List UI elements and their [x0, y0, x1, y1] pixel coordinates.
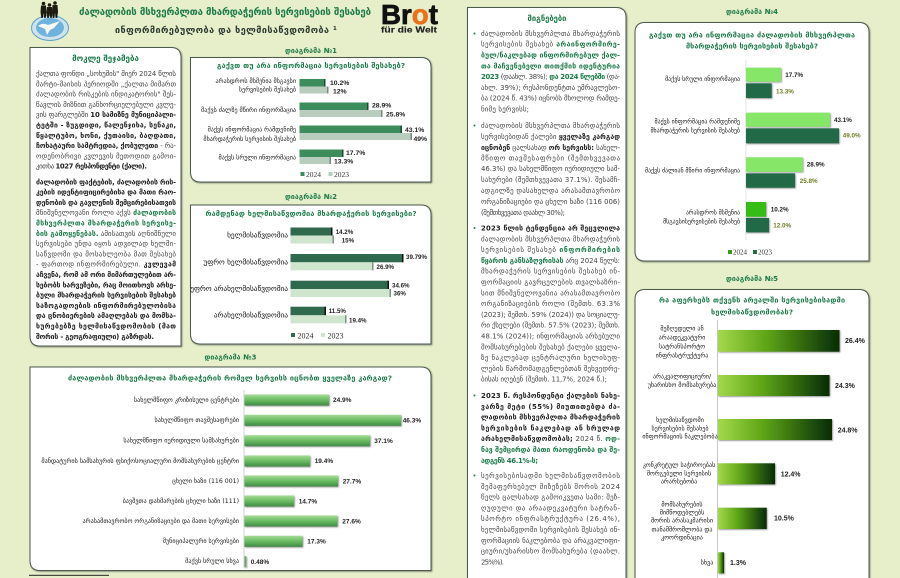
- values: 25.8%: [800, 178, 818, 185]
- finding 1: ახლ. 39%); რესპონდენტთა უმრავლესო-: [481, 83, 620, 92]
- category labels: მხარდაჭერის სერვისის შესახებ: [650, 128, 740, 134]
- question: [649, 30, 855, 50]
- question: რა აფერხებს თქვენს არეალში სერვისებისადმი: [659, 296, 845, 304]
- finding 3: სით მნიშვნელოვანია არასამთავრობო: [481, 288, 621, 297]
- category labels: [201, 78, 296, 162]
- category labels: სატრანსპორტო: [659, 344, 705, 350]
- finding 5: ციური/უხარისხო მომსახურება (დაახლ.: [481, 547, 620, 556]
- category labels: [190, 230, 288, 320]
- values: [771, 72, 861, 230]
- summary text: paragraph one: წავლის მიზნით განხორციელებული კვლე-: [36, 100, 176, 109]
- finding 3: 2023 წლის ტენდენცია არ შეცვლილა: [481, 224, 620, 232]
- summary text: paragraph two: სებობს ხარვეზები, რაც მოითხოვს არსე-: [36, 281, 176, 289]
- finding 3: [474, 224, 621, 384]
- subtitle: ინფორმირებულობა და ხელმისაწვდომობა ¹: [115, 25, 337, 36]
- finding 4: ნავ შემცირდა მათი რაოდენობა და შე-: [481, 446, 620, 454]
- category labels: მუნიციპალური სერვისები: [163, 536, 239, 545]
- values: [329, 229, 427, 324]
- finding 5: წელს ცალსახად გამოიკვეთა სამი: შეზ-: [481, 494, 620, 502]
- values: 49.0%: [843, 132, 861, 140]
- diagram 3 label: დიაგრამა №3: [204, 354, 257, 362]
- values: 46.3%: [403, 418, 421, 424]
- summary text: paragraph two: შორის - გეოგრაფიული) გაზრდას.: [36, 333, 154, 341]
- category labels: კოორდინაცია: [661, 535, 703, 542]
- values: 19.4%: [349, 318, 367, 324]
- finding 2: სერვისებიდან ქალები ყველაზე კარგად: [481, 132, 620, 141]
- finding 1: ძალადობის მსხვერპლთა მხარდაჭერის: [481, 29, 620, 38]
- question: გაქვთ თუ არა ინფორმაცია სერვისების შესახებ?: [217, 61, 405, 70]
- values: 37.1%: [374, 438, 393, 445]
- summary text: paragraph one: ჩოხატაური სამტრედია, ქობულეთი - რა-: [36, 141, 176, 150]
- panel: diagram 1: [190, 58, 431, 182]
- finding 2: იცნობენ ცალსახად ორ სერვისს: სახელ-: [481, 144, 620, 152]
- values: 12.0%: [773, 222, 792, 230]
- category labels: ინფრასტრუქტურა: [656, 352, 708, 360]
- values: 17.7%: [785, 72, 804, 79]
- legend: 2023: [758, 248, 772, 256]
- title: ძალადობის მსხვერპლთა მხარდაჭერის სერვისების შესახებ: [79, 7, 371, 18]
- category labels: [41, 395, 239, 565]
- category labels: მაქვს ძალზე მწირი ინფორმაცია: [201, 107, 296, 114]
- finding 2: სახურები (შემთხვევათა 37.1%). შესამჩ-: [481, 175, 620, 184]
- summary text: paragraph two: კების იდენტიფიცირებისა და მათი რაო-: [36, 189, 176, 197]
- summary text: paragraph two: სერვისები უნდა იყოს ადვილად ხელმი-: [36, 239, 176, 248]
- category labels: არაადეკვატური: [659, 334, 705, 342]
- finding 4: [474, 392, 620, 465]
- finding 5: [474, 471, 620, 566]
- finding 5: სპორტო ინფრასტრუქტურა (26.4%),: [481, 514, 620, 523]
- values: 13.3%: [334, 158, 353, 166]
- category labels: სერვისების შესახებ: [651, 425, 709, 432]
- category labels: არასდროს მსმენია მსგავსი: [216, 78, 296, 85]
- category labels: უფრო არახელმისაწვდომია: [190, 284, 288, 293]
- finding 4: ადგენს 46.1%-ს;: [481, 457, 538, 465]
- values: 27.6%: [342, 518, 361, 526]
- legend: [291, 332, 344, 340]
- values: 15%: [342, 238, 355, 244]
- finding 5: შემაფერხებელ მიზეზებს შორის 2024: [481, 482, 620, 491]
- values: 24.8%: [838, 428, 858, 434]
- summary text: paragraph two: მსხვერპლთა მხარდაჭერის სერვისე-: [36, 220, 176, 228]
- category labels: უხარისხო მომსახურება: [648, 382, 716, 389]
- category labels: შორის არასაკმარისი: [651, 518, 713, 525]
- summary text: paragraph two: აჩვენა, რომ ამ ორი მიმართულებით არ-: [36, 271, 176, 279]
- summary text: paragraph one: [36, 69, 176, 171]
- category labels: არახელმისაწვდომია: [214, 310, 288, 320]
- category labels: მხარდაჭერის სერვისის შესახებ: [203, 136, 296, 143]
- category labels: მაქვს ინფორმაცია რამდენიმე: [655, 118, 740, 126]
- finding 3: ძალადობის მსხვერპლთა მხარდაჭერის: [481, 234, 620, 243]
- finding 2: (შემთხვევათა დაახლ 30%);: [481, 209, 565, 217]
- values: 13.3%: [776, 88, 794, 96]
- values: 26.9%: [376, 264, 395, 271]
- summary text: paragraph one: ქალთა ფონდი „სოხუმის" მიერ 2024 წლის: [36, 69, 176, 78]
- summary text: paragraph two: ბის გამოყენებას. ამისათვის აღნიშნული: [36, 230, 176, 238]
- finding 1: [474, 29, 620, 114]
- values: 17.3%: [307, 538, 326, 546]
- category labels: მორგებული სერვისის: [647, 470, 711, 477]
- values: 10.5%: [774, 516, 795, 522]
- finding 4: სერვისების ნაკლებად ან სრულად: [481, 424, 620, 432]
- summary text: paragraph two: ბული მხარდაჭერის სერვისების შესახებ: [36, 292, 176, 300]
- category labels: ხელმისაწვდომია: [227, 230, 288, 240]
- question: მხარდაჭერის სერვისების შესახებ?: [686, 42, 818, 50]
- summary text: paragraph one: ძალადობის რისკების ინდიკატორის" შეს-: [36, 90, 176, 99]
- panel: diagram 4: [635, 22, 869, 261]
- finding 3: ორგანიზაციების როლი (შემთხ. 63.3%: [481, 299, 620, 308]
- summary text: paragraph two: - ფართოდ ინფორმირებული. კვლევამ: [36, 260, 176, 269]
- category labels: მაქვს სრული ინფორმაცია: [219, 154, 296, 162]
- category labels: ცხელი ხაზი (116 001): [172, 477, 239, 485]
- panel: diagram 2: [190, 205, 431, 344]
- values: 14.2%: [336, 229, 354, 236]
- finding 3: ბისას იღებენ (შემთხ. 11,7%, 2024 წ.);: [481, 376, 607, 384]
- summary text: paragraph one: მარტი-მაისის პერიოდში „ქალთა მიმართ: [36, 79, 176, 88]
- finding 1: 2023 (დაახლ. 38%); და 2024 წლებში (და-: [481, 73, 620, 81]
- legend: 2024: [298, 332, 314, 340]
- values: 19.4%: [315, 458, 333, 465]
- legend: 2023: [328, 332, 344, 340]
- values: 14.7%: [299, 498, 317, 506]
- finding 1: ბულ/ნაკლებად ინფორმირებულ ქალ-: [481, 52, 620, 60]
- category labels: სხვა: [701, 560, 713, 567]
- category labels: [642, 325, 718, 567]
- panel: findings: [468, 8, 626, 578]
- finding 5: ფორმაციის ნაკლებობა და არაკვალიფი-: [481, 536, 620, 545]
- panel: diagram 3: [30, 367, 431, 570]
- finding 2: 46.3%) და სახელმწიფო იურიდიული სამ-: [481, 164, 620, 173]
- finding 2: [474, 121, 621, 217]
- finding 2: ძალადობის მსხვერპლთა მხარდაჭერის: [481, 121, 620, 130]
- summary text: paragraph one: ოდენობრივი კვლევის მეთოდით გამოი-: [36, 151, 176, 160]
- category labels: სახელმწიფო კრიზისული ცენტრები: [134, 395, 239, 404]
- axis: [244, 390, 245, 568]
- logo: women's fund emblem: [32, 1, 68, 40]
- finding 3: 48.1% (2024)); ინფორმაციას არსებული: [481, 332, 620, 340]
- category labels: სახელმწიფო იურიდიული სამსახურები: [123, 436, 239, 444]
- values: 17.7%: [346, 150, 365, 157]
- values: [251, 397, 421, 566]
- values: 36%: [394, 290, 406, 298]
- summary text: paragraph one: კითხა 1027 რესპონდენტი (ქალი).: [36, 163, 147, 171]
- values: 11.5%: [329, 308, 346, 315]
- values: 39.79%: [406, 254, 427, 261]
- values: 24.3%: [835, 383, 856, 390]
- category labels: არარსებობა: [661, 479, 697, 486]
- footnote rule: [29, 575, 109, 576]
- category labels: [645, 76, 740, 226]
- bars: [244, 394, 401, 567]
- finding 4: ლადობის მსხვერპლთა მხარდაჭერის: [481, 414, 620, 422]
- category labels: მაქვს ინფორმაცია რამდენიმე: [208, 126, 296, 134]
- summary text: paragraph two: ხურებებზე ხელმისაწვდომობის (მათ: [36, 322, 176, 330]
- question: ძალადობის მსხვერპლთა მხარდაჭერის რომელ სერვისს იცნობთ ყველაზე კარგად?: [68, 374, 392, 382]
- category labels: სერვისების შესახებ: [239, 86, 296, 94]
- legend: [728, 248, 772, 256]
- category labels: ინფორმაციის ნაკლებობა: [642, 434, 718, 441]
- values: 27.7%: [343, 478, 361, 486]
- values: 10.2%: [330, 80, 349, 87]
- category labels: არაკვალიფიციური/: [653, 374, 712, 380]
- question: [659, 296, 845, 316]
- finding 2: ადგილზე დასახელდა არასამთავრობო: [481, 186, 621, 195]
- finding 2: მწიფო თავშესაფრები (შემთხვევათა: [481, 154, 620, 162]
- values: 12.4%: [781, 472, 801, 478]
- legend: 2024: [306, 170, 321, 179]
- finding 3: მხარდაჭერის სერვისების შესახებ ინ-: [481, 267, 620, 276]
- values: 26.4%: [845, 338, 866, 345]
- bars: [718, 330, 840, 573]
- category labels: სახელმწიფო თავშესაფრები: [155, 415, 239, 424]
- category labels: მსგავსისერვისების შესახებ: [663, 218, 740, 226]
- finding 1: თა მაჩვენებელი თითქმის იდენტურია: [481, 62, 620, 70]
- category labels: მაქვს ძალიან მწირი ინფორმაცია: [645, 168, 740, 174]
- values: [730, 338, 866, 567]
- bars: [290, 228, 404, 323]
- question: გაქვთ თუ არა ინფორმაცია ძალადობის მსხვერპლთა: [649, 30, 855, 40]
- finding 1: ბა (2024 წ. 43%) იცნობს მხოლოდ რამდე-: [481, 94, 620, 103]
- values: 25.8%: [386, 112, 405, 118]
- finding 3: რი ქსელები (შემთხ. 57.5% (2023); შემთხ.: [481, 321, 620, 330]
- finding 3: ფორმაციის გავრცელების თვალსაზრი-: [481, 278, 620, 286]
- values: 28.9%: [372, 102, 391, 110]
- category labels: არასამთავრობო ორგანიზაციები და მათი სერვისები: [83, 516, 239, 525]
- category labels: ხელმისაწვდომი: [656, 417, 704, 424]
- finding 1: ნიმე სერვისს;: [481, 104, 529, 114]
- summary text: paragraph two: საწვდომი და მოსახლეობა მათ შესახებ: [36, 250, 176, 258]
- category labels: ბავშვთა დახმარების ცხელი ხაზი (111): [123, 496, 239, 505]
- finding 1: სერვისების შესახებ არაინფორმირე-: [481, 40, 620, 49]
- values: [330, 80, 427, 166]
- finding 3: სერვისების შესახებ ინფორმირების: [481, 245, 620, 254]
- legend: 2023: [334, 170, 349, 179]
- summary text: paragraph two: ძალადობის ფაქტების, ძალადობის რის-: [36, 178, 176, 186]
- summary text: paragraph two: დენობის და გავლენის შემცირებისათვის: [36, 199, 176, 207]
- category labels: მომსახურების: [661, 501, 703, 508]
- finding 5: 25%%).: [481, 558, 504, 566]
- values: 10.2%: [771, 206, 789, 214]
- legend: [300, 170, 349, 179]
- legend: 2024: [733, 248, 748, 256]
- finding 4: 2023 წ. რესპონდენტი ქალების ნახე-: [481, 392, 620, 400]
- bars: [746, 68, 839, 232]
- values: 0.48%: [251, 559, 269, 566]
- category labels: მანდატურის სამსახურის ფსიქოსოციალური მომსახურების ცენტრი: [41, 456, 239, 465]
- values: 1.3%: [730, 560, 747, 567]
- summary text: paragraph two: და ცნობიერების ამაღლებას და მომსა-: [36, 312, 176, 320]
- values: 49%: [414, 136, 427, 143]
- category labels: არასდროს მსმენია: [686, 210, 740, 216]
- finding 3: ზე ნაკლებად ცენტრალური ხელისუფ-: [481, 353, 620, 362]
- axis: [717, 320, 718, 578]
- finding 5: ღუდული და არაადეკვატური სატრან-: [481, 503, 620, 512]
- summary text: paragraph two: [36, 178, 176, 341]
- category labels: მაქვს სრული სხვა: [185, 556, 239, 565]
- category labels: უფრო ხელმისაწვდომია: [203, 258, 288, 266]
- finding 3: ლების წარმომადგენლებთან შეხვედრე-: [481, 364, 620, 373]
- category labels: თანამშრომლობა და: [652, 526, 712, 533]
- finding 2: ორგანიზაციები და ცხელი ხაზი (116 006): [481, 197, 620, 206]
- finding 3: წყაროს განსაზღვრისას არც 2024 წელს:: [481, 256, 620, 265]
- summary text: paragraph two: საზოგადოების ინფორმირებულობისა: [36, 302, 176, 310]
- axis: [744, 60, 747, 240]
- summary heading: მოკლე შეჯამება: [72, 54, 139, 63]
- diagram 2 label: დიაგრამა №2: [285, 193, 337, 201]
- finding 4: ვარზე მეტი (55%) მიუთითებდა ძა-: [481, 403, 620, 411]
- values: 24.9%: [333, 397, 352, 404]
- values: 28.9%: [807, 162, 825, 168]
- diagram 5 label: დიაგრამა №5: [726, 275, 778, 283]
- finding 5: სერვისებისადმი ხელმისაწვდომობის: [481, 471, 620, 480]
- panel: summary: [30, 48, 181, 346]
- category labels: შეზღუდული ან: [660, 325, 704, 332]
- category labels: მაქვს სრული ინფორმაცია: [665, 76, 740, 83]
- category labels: კონკრეტულ საჭიროებას: [643, 462, 715, 469]
- summary text: paragraph two: მნიშვნელოვანი როლი აქვს ძალადობის: [36, 208, 176, 217]
- summary text: paragraph one: ტეტში - ზუგდიდი, წალენჯიხა, სენაკი,: [36, 122, 176, 130]
- values: 43.1%: [834, 117, 852, 124]
- finding 5: ხელმისაწვდომი სერვისების შესახებ ინ-: [481, 525, 620, 534]
- values: 34.6%: [392, 282, 410, 290]
- question: ხელმისაწვდომობას?: [711, 308, 793, 316]
- diagram 4 label: დიაგრამა №4: [726, 8, 778, 16]
- category labels: მიმწოდებლებს: [660, 509, 704, 516]
- summary text: paragraph one: წყალტუბო, ხონი, ქუთაისი, ბაღდათი,: [36, 132, 176, 140]
- finding 3: მომსახურებების შესახებ ქალები ყველა-: [481, 342, 620, 351]
- finding 3: (2023); შემთხ. 59% (2024)) და სოციალუ-: [481, 311, 620, 319]
- values: 12%: [333, 88, 347, 96]
- bars: [300, 79, 412, 164]
- panel: diagram 5: [635, 290, 869, 578]
- diagram 1 label: დიაგრამა №1: [285, 47, 337, 55]
- values: 43.1%: [405, 127, 424, 134]
- question: რამდენად ხელმისაწვდომია მხარდაჭერის სერვისები?: [206, 209, 416, 218]
- findings heading: მიგნებები: [528, 14, 566, 23]
- finding 4: არახელმისაწვდომობას; 2024 წ. ოდ-: [481, 435, 620, 443]
- logo: Brot für die Welt: für die Welt: [381, 24, 437, 34]
- summary text: paragraph one: ვის ფარგლებში 10 სამიზნე მუნიციპალი-: [36, 110, 176, 119]
